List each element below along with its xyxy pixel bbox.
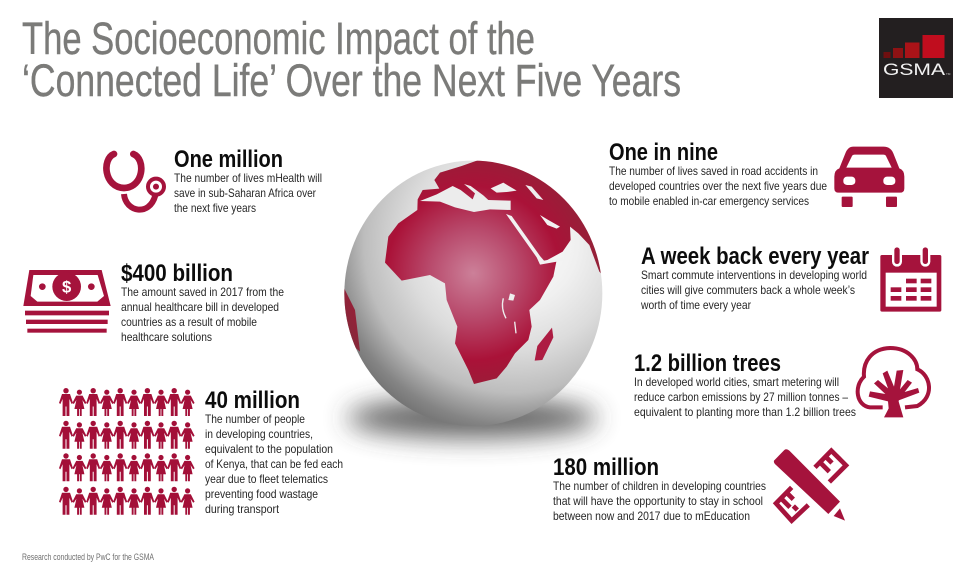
text: 40 million: during transport [205, 502, 280, 516]
title: ‘Connected Life’ Over the Next Five Years [22, 55, 681, 106]
footer note: Research conducted by PwC for the GSMA [22, 552, 154, 563]
title [22, 13, 681, 106]
globe sphere [344, 161, 602, 426]
icon: tree [858, 348, 929, 417]
text: one million: The number of lives mHealth will [174, 171, 322, 185]
text: 40 million: 40 million [205, 387, 300, 414]
text: a week back: Smart commute interventions in developing world [641, 268, 867, 282]
text: a week back: worth of time every year [640, 298, 751, 312]
globe with Africa [340, 158, 613, 426]
continents [340, 158, 613, 384]
text: one in nine: One in nine [609, 139, 718, 166]
text: one million [174, 146, 322, 215]
logo: GSMA [879, 18, 953, 98]
logo: GSMA: TM [946, 72, 951, 76]
text: 180 million: between now and 2017 due to mEducation [553, 509, 750, 523]
text: $400 billion: $400 billion [121, 260, 233, 287]
icon: pencil and ruler [774, 449, 846, 521]
text: 1.2 billion trees: In developed world cities, smart metering will [634, 375, 839, 389]
text: $400 billion: healthcare solutions [121, 330, 212, 344]
text: 40 million [205, 387, 343, 516]
text: 40 million: of Kenya, that can be fed each [205, 457, 343, 471]
text: 40 million: The number of people [205, 412, 305, 426]
text: $400 billion [121, 260, 284, 344]
icon: rows of people [59, 388, 195, 515]
icon: stethoscope [106, 154, 164, 210]
globe shadow [347, 398, 597, 438]
icon: banknotes [23, 270, 111, 333]
text: a week back: cities will give commuters back a whole week’s [641, 283, 855, 297]
text: 180 million: 180 million [553, 454, 659, 481]
text: a week back: A week back every year [641, 243, 869, 270]
title: The Socioeconomic Impact of the [22, 13, 535, 64]
icon: car [834, 147, 904, 207]
text: one in nine [609, 139, 827, 208]
text: 1.2 billion trees [634, 350, 856, 419]
text: 1.2 billion trees: equivalent to planting more than 1.2 billion trees [634, 405, 856, 419]
icon: calendar [880, 247, 941, 312]
text: one million: the next five years [174, 201, 256, 215]
logo: GSMA: GSMA [883, 61, 945, 79]
text: 40 million: equivalent to the population [205, 442, 333, 456]
text: one million: One million [174, 146, 283, 173]
text: 180 million: that will have the opportunity to stay in school [553, 494, 763, 508]
text: $400 billion: The amount saved in 2017 from the [121, 285, 284, 299]
text: 180 million [553, 454, 766, 523]
text: one in nine: developed countries over the next five years due [609, 179, 827, 193]
text: one in nine: to mobile enabled in-car emergency services [609, 194, 809, 208]
text: 1.2 billion trees: reduce carbon emissions by 27 million tonnes – [634, 390, 848, 404]
icon: banknotes: $ [62, 277, 72, 296]
text: one million: save in sub-Saharan Africa over [174, 186, 316, 200]
text: $400 billion: annual healthcare bill in developed [121, 300, 279, 314]
text: $400 billion: countries as a result of mobile [121, 315, 257, 329]
text: 40 million: preventing food wastage [205, 487, 318, 501]
text: one in nine: The number of lives saved in road accidents in [609, 164, 818, 178]
text: 40 million: in developing countries, [205, 427, 313, 441]
text: 40 million: year due to fleet telematics [205, 472, 328, 486]
text: 1.2 billion trees: 1.2 billion trees [634, 350, 781, 377]
seas [420, 184, 511, 212]
text: a week back [640, 243, 869, 312]
text: 180 million: The number of children in developing countries [553, 479, 766, 493]
